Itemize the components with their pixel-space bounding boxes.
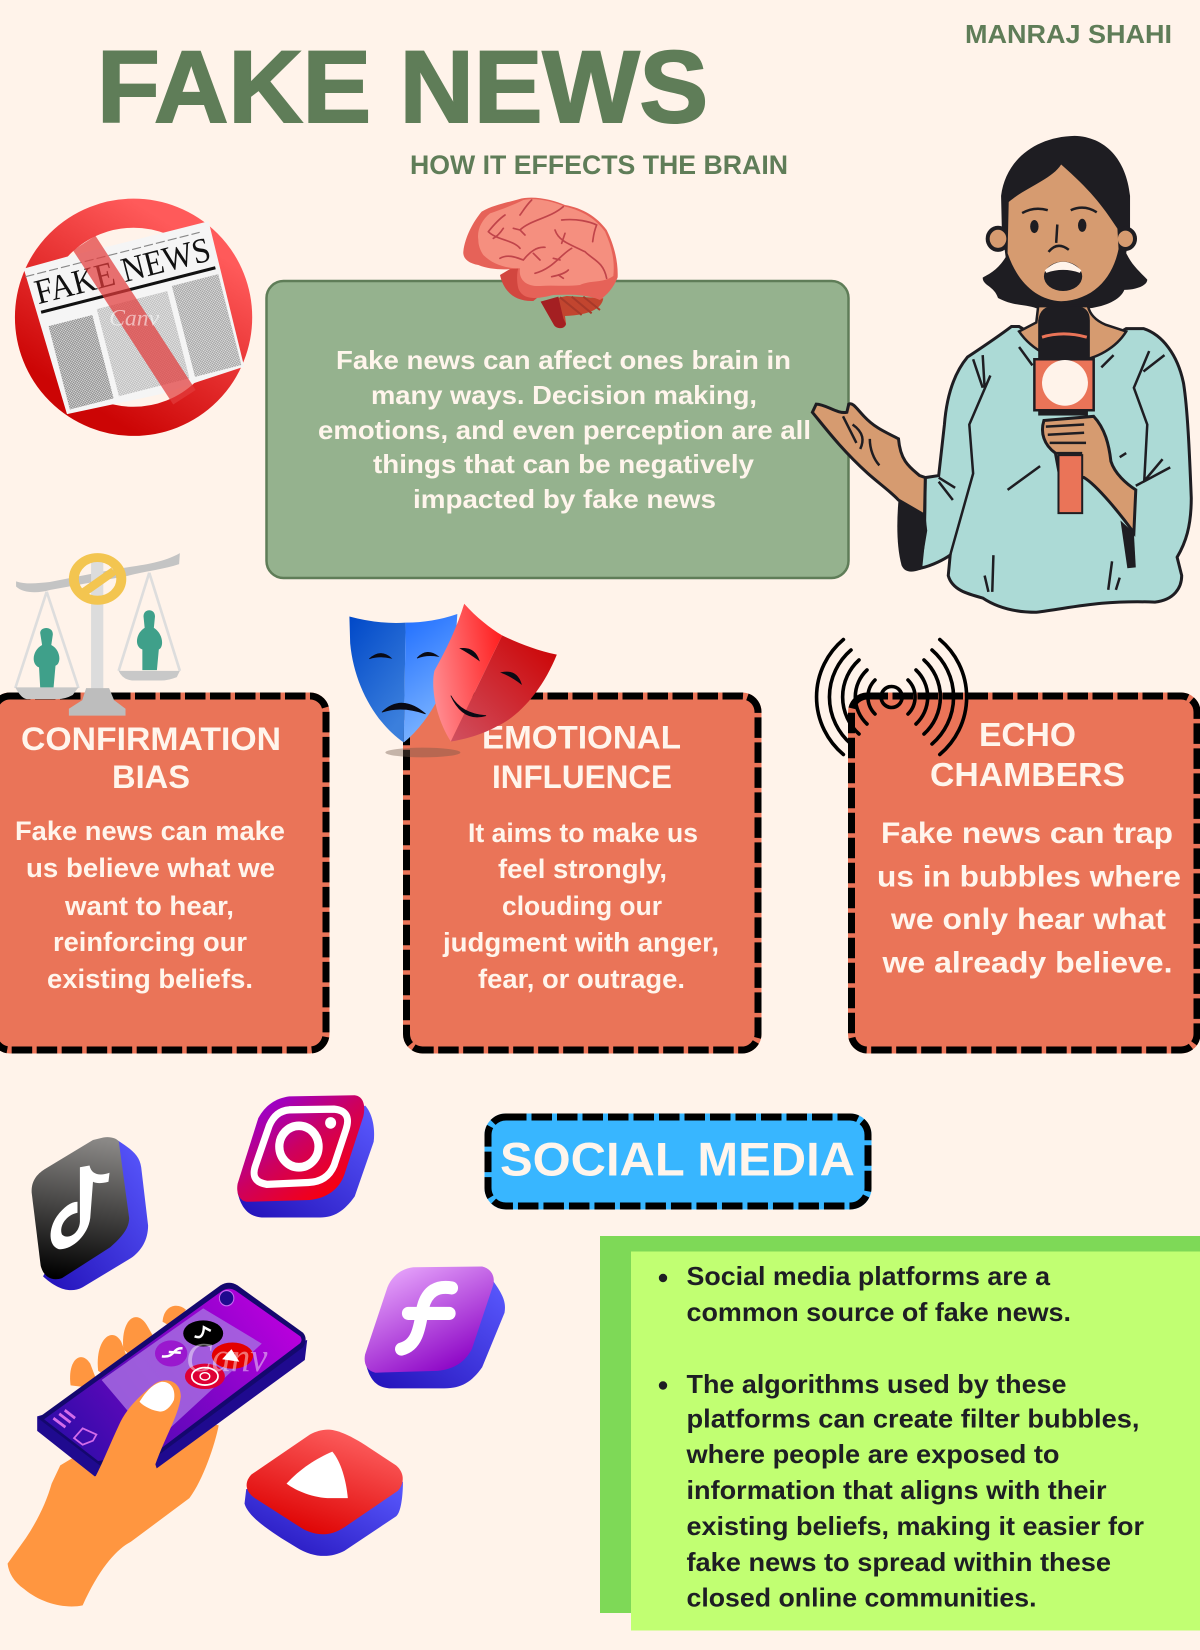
body text: want to hear, [64,891,234,921]
body text: clouding our [502,891,662,921]
panel: emotional influence: INFLUENCE [492,759,672,795]
body text: fear, or outrage. [478,964,685,994]
author name: MANRAJ SHAHI [965,19,1172,49]
card background [852,696,1197,1050]
panel: echo chambers: CHAMBERS [930,756,1125,793]
heading text: SOCIAL MEDIA [500,1132,855,1186]
body text: we only hear what [890,903,1166,936]
heading: EMOTIONAL [482,720,681,756]
body text [15,816,285,994]
title: FAKE NEWS [97,30,708,144]
icon: theatre masks [349,604,557,757]
icon: crossed-out fake newspaper: FAKE NEWS [31,230,215,312]
social media heading [488,1117,868,1206]
panel: social media facts [600,1236,1200,1630]
bullet list: Social media platforms are a [686,1261,1051,1291]
body text: Fake news can make [15,816,285,846]
intro text: emotions, and even perception are all [318,415,811,445]
illustration: phone: Canv [186,1335,268,1380]
body text: us believe what we [26,853,275,883]
subtitle: HOW IT EFFECTS THE BRAIN [410,150,788,180]
illustration: phone [37,1283,307,1476]
intro box [266,281,848,578]
clothing folds [939,347,1170,592]
heading badge [488,1117,868,1206]
bullet list [659,1261,1144,1612]
panel: intro [266,281,848,578]
bullet list: where people are exposed to [685,1439,1060,1469]
bullet list: existing beliefs, making it easier for [686,1511,1144,1541]
icon: crossed-out fake newspaper: Canv [109,305,160,331]
intro text: impacted by fake news [413,484,716,514]
bullet list: closed online communities. [686,1582,1036,1612]
panel: confirmation bias [0,696,326,1050]
back panel [600,1236,1200,1613]
bullet list: common source of fake news. [686,1297,1071,1327]
body text: It aims to make us [468,818,698,848]
icon: youtube [245,1430,403,1556]
body text: we already believe. [881,946,1172,980]
face [988,165,1135,301]
icon: broadcast signal [817,640,967,754]
panel: emotional influence [406,696,758,1050]
bullet list: The algorithms used by these [686,1369,1066,1399]
bullet list: platforms can create filter bubbles, [686,1404,1140,1434]
front panel [631,1252,1200,1630]
icon: instagram [237,1095,374,1217]
intro text: things that can be negatively [373,449,755,479]
body text: judgment with anger, [442,928,719,958]
microphone [1034,306,1094,513]
icon: balance scale [15,553,180,716]
bullet list: information that aligns with their [686,1475,1106,1505]
card background [406,696,758,1050]
panel: confirmation bias: BIAS [112,759,190,795]
bullet list: fake news to spread within these [686,1547,1111,1577]
body text [877,817,1181,980]
body text: existing beliefs. [47,964,253,994]
heading: CONFIRMATION [21,721,281,757]
icon: facebook-style app [365,1267,505,1388]
hair [983,136,1147,308]
body text: us in bubbles where [877,860,1181,894]
left arm and hand [812,404,927,572]
card background [0,696,326,1050]
illustration: social media icons and phone [8,1095,505,1606]
heading: ECHO [979,716,1076,753]
illustration: hand [8,1306,219,1606]
body text [442,818,719,994]
body text: Fake news can trap [881,817,1173,850]
panel: echo chambers [852,696,1197,1050]
icon: crossed-out fake newspaper [24,213,244,421]
illustration: thumb [95,1380,181,1495]
intro text: many ways. Decision making, [371,380,757,410]
neck [1019,306,1126,361]
icon: brain [463,198,618,328]
intro text: Fake news can affect ones brain in [336,345,791,375]
body text: reinforcing our [53,927,247,957]
right sleeve cuff and arm [1042,416,1136,568]
illustration: news reporter [812,136,1191,612]
shirt [921,327,1191,612]
body text: feel strongly, [498,854,667,884]
intro text [318,345,811,514]
icon: tiktok [32,1137,148,1290]
